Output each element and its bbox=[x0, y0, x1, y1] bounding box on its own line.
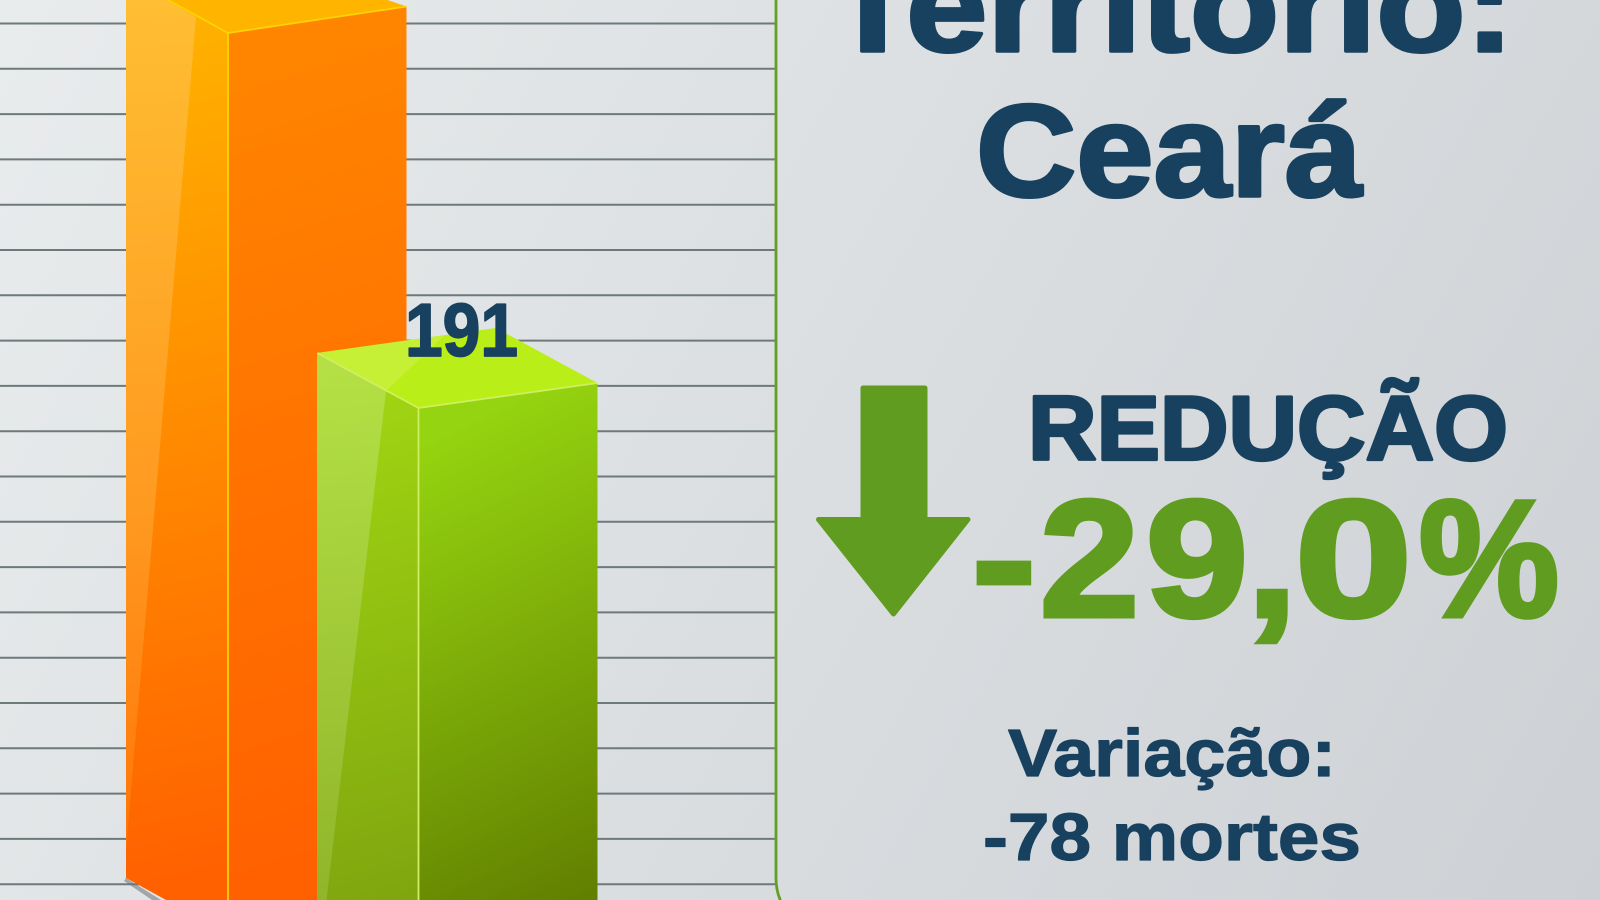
green bar side highlight bbox=[317, 353, 386, 900]
bar: green current-period value bbox=[317, 328, 598, 900]
value label: 191: 191 bbox=[405, 288, 518, 372]
stat: percent reduction: , bbox=[1247, 467, 1297, 652]
title: Ceará: Ceará bbox=[976, 77, 1363, 224]
green bar top highlight bbox=[317, 335, 445, 391]
text: Variação: Variação: bbox=[1008, 716, 1336, 791]
panel: Ceará reduction summary border bbox=[776, 0, 790, 900]
orange bar side face bbox=[126, 0, 228, 900]
green bar top face bbox=[317, 328, 598, 408]
orange bar side highlight bbox=[126, 0, 196, 850]
chart grid lines bbox=[0, 24, 775, 884]
green bar side face bbox=[317, 353, 418, 900]
stat: percent reduction: - bbox=[972, 467, 1036, 652]
stat: percent reduction: 9 bbox=[1146, 467, 1248, 652]
heading: REDUÇÃO: REDUÇÃO bbox=[1028, 378, 1508, 480]
green bar front face bbox=[418, 383, 598, 900]
stat: percent reduction: 0 bbox=[1295, 467, 1412, 652]
stat: percent reduction: % bbox=[1419, 467, 1559, 652]
bar: orange previous-period value bbox=[124, 0, 406, 900]
stat: percent reduction: 2 bbox=[1040, 467, 1139, 652]
icon: down arrow bbox=[818, 388, 968, 614]
green bar edge highlights bbox=[317, 353, 598, 900]
orange bar top face bbox=[126, 0, 406, 33]
orange bar edge highlights bbox=[168, 0, 406, 900]
orange bar front face bbox=[228, 6, 406, 900]
bar shadow bbox=[124, 878, 161, 900]
text: -78 mortes: -78 mortes bbox=[983, 800, 1361, 875]
